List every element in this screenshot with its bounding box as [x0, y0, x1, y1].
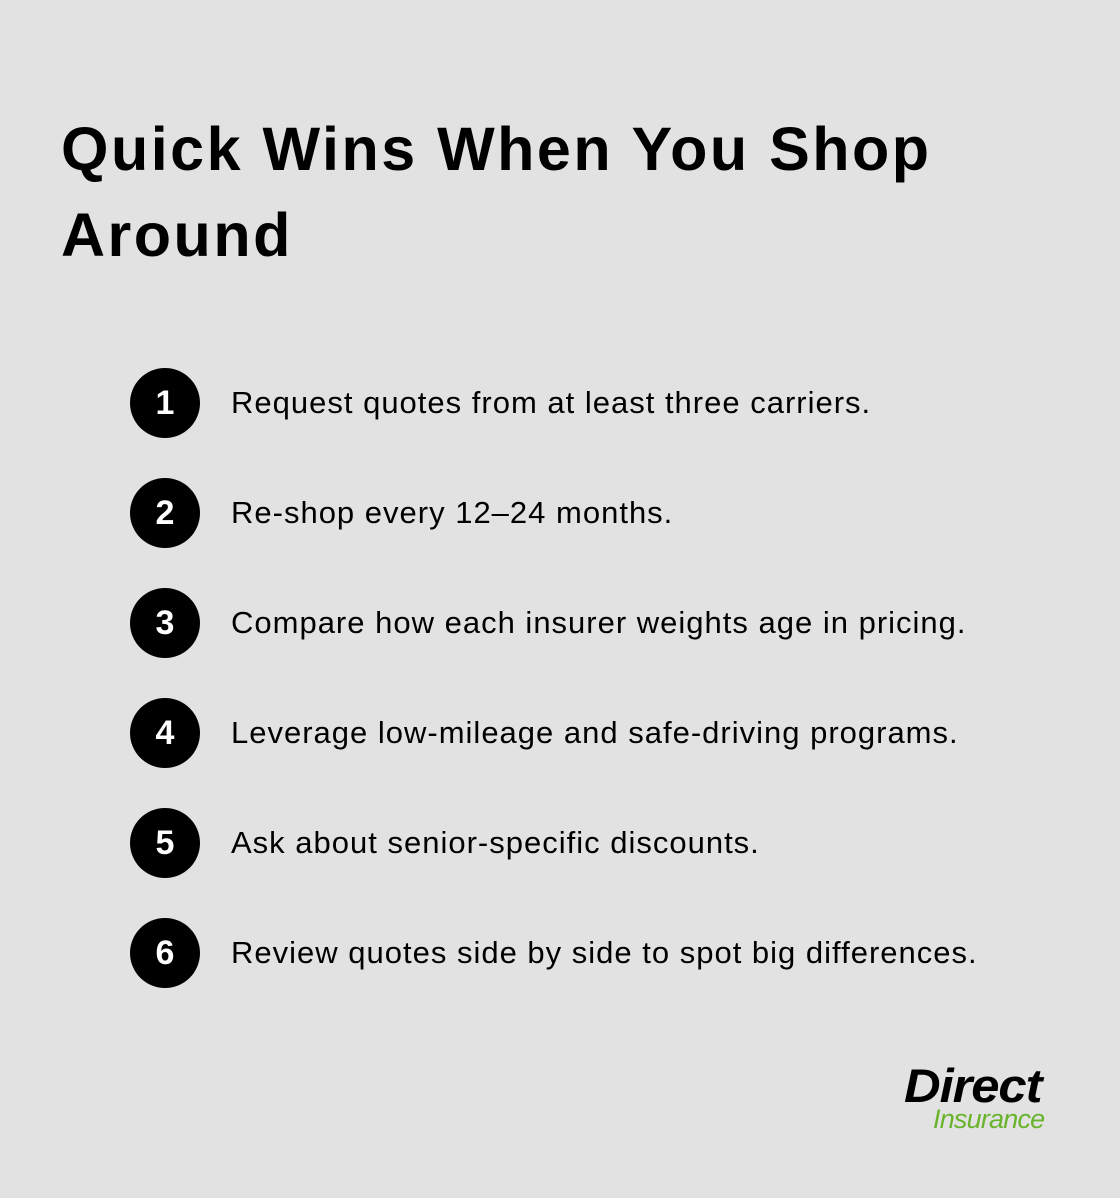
logo: [904, 1059, 1044, 1134]
item 4: [130, 698, 959, 768]
item 5: Ask about senior-specific discounts.: [231, 825, 760, 860]
item 5: [130, 808, 760, 878]
item 5: 5: [156, 824, 174, 862]
item 4: Leverage low-mileage and safe-driving programs.: [231, 715, 959, 750]
item 2: Re-shop every 12–24 months.: [231, 495, 673, 530]
logo: Insurance: [933, 1104, 1044, 1134]
title: Around: [61, 201, 293, 269]
logo: Direct: [904, 1059, 1041, 1112]
title: Quick Wins When You Shop: [61, 115, 932, 183]
item 4: 4: [156, 714, 174, 752]
item 2: [130, 478, 673, 548]
item 3: [130, 588, 967, 658]
item 6: Review quotes side by side to spot big differences.: [231, 935, 978, 970]
item 3: Compare how each insurer weights age in pricing.: [231, 605, 967, 640]
item 6: 6: [156, 934, 174, 972]
item 2: 2: [156, 494, 174, 532]
item 1: [130, 368, 871, 438]
item 3: 3: [156, 604, 174, 642]
item 1: 1: [156, 384, 174, 422]
title: [61, 115, 932, 269]
item 6: [130, 918, 978, 988]
item 1: Request quotes from at least three carriers.: [231, 385, 871, 420]
